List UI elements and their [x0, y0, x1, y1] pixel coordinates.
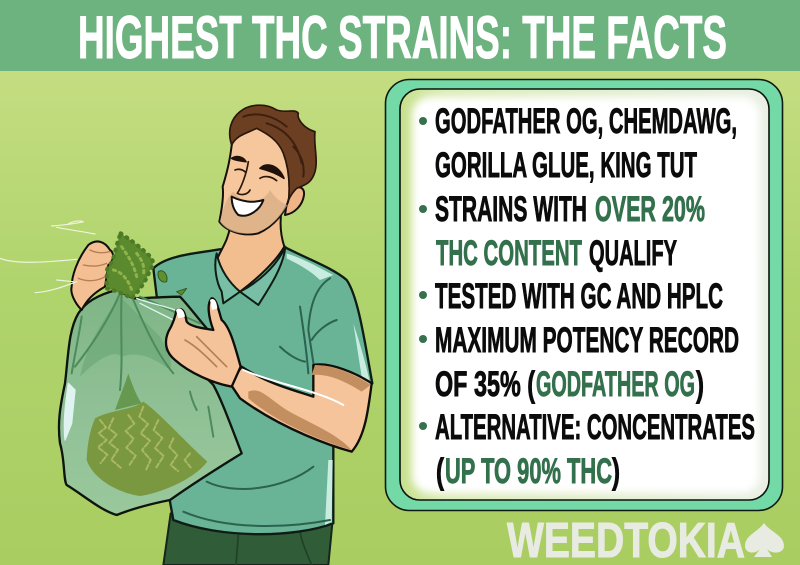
icon: spade: [745, 523, 784, 557]
fact: over 20% THC: QUALIFY: [589, 233, 677, 273]
fact: concentrates: (: [436, 451, 444, 491]
bag folds: [72, 293, 213, 437]
fact: concentrates: ): [612, 451, 620, 491]
hair highlights: [243, 114, 304, 177]
herb texture: [98, 407, 191, 471]
collar: [215, 247, 285, 305]
shirt folds: [183, 278, 337, 526]
shopping bag: [59, 290, 242, 515]
dark fold above herb: [115, 373, 142, 410]
hand creases: [185, 337, 227, 367]
fact: potency record: OF 35% (: [435, 364, 535, 404]
open hand: [166, 298, 241, 387]
stubble: [220, 190, 287, 234]
fingernails: [176, 299, 217, 318]
fact: over 20% THC: [435, 189, 705, 273]
fact: concentrates: UP TO 90% THC: [445, 451, 612, 491]
neck: [217, 210, 284, 292]
bullet points: [419, 117, 427, 430]
bag dark gathered area: [80, 297, 171, 377]
forearm: [230, 364, 372, 452]
fact: over 20% THC: OVER 20%: [595, 189, 705, 229]
ear: [285, 187, 304, 215]
eyes and nose: [235, 162, 277, 195]
bag fold highlights: [64, 298, 175, 440]
shirt highlight: [287, 253, 369, 525]
fact: over 20% THC: THC CONTENT: [436, 233, 582, 273]
herb inside bag: [87, 402, 207, 496]
finger lines: [78, 250, 110, 281]
motion lines: [0, 221, 95, 293]
fact: strain names: [435, 101, 737, 185]
smile: [232, 197, 263, 216]
trousers: [163, 513, 333, 565]
header banner: [0, 0, 800, 71]
fact: over 20% THC: STRAINS WITH: [435, 189, 587, 229]
fact: potency record: [435, 320, 739, 404]
face: [219, 124, 290, 234]
fact: concentrates: [435, 407, 755, 491]
panel: facts: [386, 80, 782, 510]
shirt torso and sleeve: [153, 247, 372, 534]
bud highlights: [113, 247, 144, 290]
trouser creases: [236, 532, 312, 565]
eyebrows: [232, 157, 284, 178]
holding hand: [71, 241, 113, 310]
arm highlight: [243, 370, 343, 405]
fact: potency record: ): [696, 364, 704, 404]
falling herb bits: [158, 271, 187, 295]
top bud: [106, 233, 153, 298]
hair: [230, 105, 316, 200]
illustration: man holding bag of cannabis: [0, 105, 372, 565]
forearm shading: [248, 365, 371, 450]
